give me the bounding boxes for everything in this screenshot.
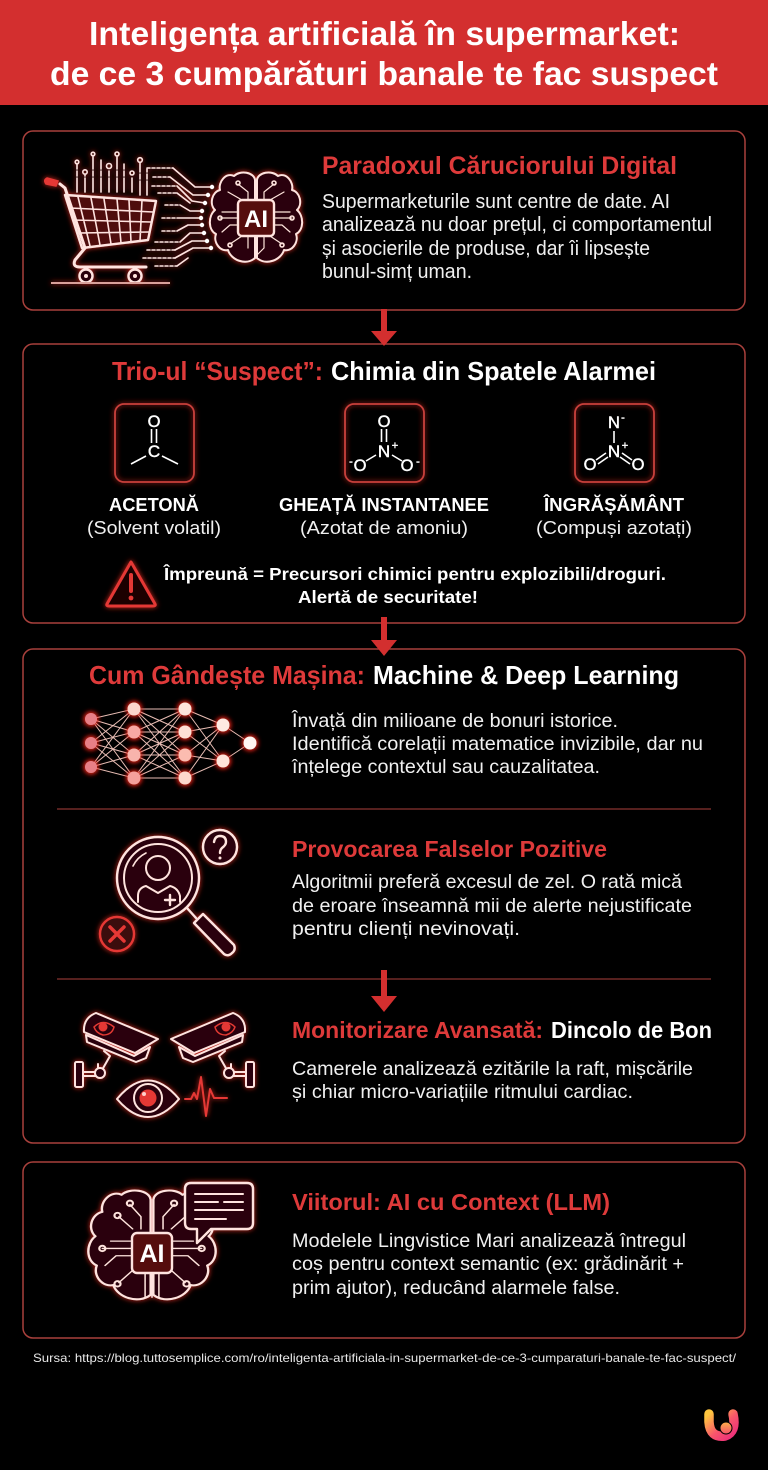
heading: Machine & Deep Learning: [373, 660, 679, 690]
heading: Chimia din Spatele Alarmei: [331, 356, 656, 386]
AI chip label: AI: [244, 206, 268, 233]
arrow: trio to machine: [371, 617, 397, 656]
icon: shopping cart connected to AI brain: [45, 152, 302, 283]
icon: ammonium nitrate formula: +: [392, 440, 398, 452]
label: fertilizer: ÎNGRĂȘĂMÂNT: [543, 494, 684, 515]
header banner: [0, 0, 768, 105]
body text: [292, 871, 692, 940]
body text: de eroare înseamnă mii de alerte nejustificate: [292, 895, 692, 917]
body text: Modelele Lingvistice Mari analizează întregul: [292, 1230, 686, 1252]
icon: fertilizer formula: +: [622, 440, 628, 452]
panel: suspect trio: [23, 344, 745, 623]
chart: neural network: [85, 702, 256, 784]
body text: Supermarketurile sunt centre de date. AI: [322, 190, 670, 213]
icon: fertilizer formula: N: [608, 442, 620, 461]
heart pulse: [185, 1077, 227, 1116]
icon: ammonium nitrate formula: -: [349, 456, 353, 468]
icon: fertilizer formula: O: [632, 456, 645, 474]
icon: warning triangle: [107, 562, 155, 606]
panel: digital cart paradox: [23, 131, 745, 310]
source line: Sursa: https://blog.tuttosemplice.com/ro/inteligenta-artificiala-in-supermarket-de-ce-3-cumparaturi-banale-te-fac-suspect/: [33, 1351, 737, 1365]
icon: fertilizer formula: O: [584, 456, 597, 474]
icon: magnifier over person: [100, 830, 237, 955]
label: instant ice: [279, 494, 489, 538]
heading: Provocarea Falselor Pozitive: [292, 836, 607, 862]
label: instant ice: GHEAȚĂ INSTANTANEE: [279, 494, 489, 515]
label: fertilizer: (Compuși azotați): [536, 518, 692, 538]
icon: ammonium nitrate formula: -: [416, 456, 420, 468]
icon: ammonium nitrate formula: O: [354, 457, 367, 475]
body text: coș pentru context semantic (ex: grădinărit +: [292, 1253, 684, 1275]
heading: [89, 660, 679, 690]
icon: ammonium nitrate formula: [345, 404, 424, 482]
body text: Identifică corelații matematice invizibile, dar nu: [292, 733, 703, 755]
left camera: [75, 1013, 158, 1087]
body text: și asocierile de produse, dar îi lipsește: [322, 237, 650, 260]
panel: how the machine thinks: [23, 649, 745, 1143]
label: acetone: [87, 494, 221, 538]
heading: Monitorizare Avansată:: [292, 1017, 543, 1043]
body text: [292, 1058, 693, 1103]
security alert text: Alertă de securitate!: [298, 587, 478, 607]
icon: ammonium nitrate formula: O: [401, 457, 414, 475]
label: fertilizer: [536, 494, 692, 538]
label: acetone: (Solvent volatil): [87, 518, 221, 538]
heading: Dincolo de Bon: [551, 1017, 712, 1043]
eye: [117, 1080, 179, 1117]
label: instant ice: (Azotat de amoniu): [300, 518, 468, 538]
body text: înțelege contextul sau cauzalitatea.: [291, 756, 600, 778]
security alert text: Împreună = Precursori chimici pentru explozibili/droguri.: [163, 563, 666, 584]
body text: Algoritmii preferă excesul de zel. O rată mică: [292, 871, 682, 893]
right camera: [171, 1013, 254, 1087]
icon: fertilizer formula: N: [608, 414, 620, 432]
icon: acetone formula: O: [148, 413, 161, 431]
body text: Camerele analizează ezitările la raft, mișcările: [292, 1058, 693, 1080]
body text: și chiar micro-variațiile ritmului cardiac.: [292, 1081, 633, 1103]
body text: [322, 190, 712, 283]
heading: [112, 356, 656, 386]
body text: [291, 709, 703, 778]
title: Inteligența artificială în supermarket:: [89, 15, 680, 53]
arrow: cart paradox to trio: [371, 309, 397, 346]
body text: prim ajutor), reducând alarmele false.: [292, 1277, 620, 1299]
label: acetone: ACETONĂ: [109, 494, 199, 515]
AI chip label: AI: [140, 1240, 164, 1268]
icon: AI brain with speech bubble: [88, 1183, 253, 1299]
icon: acetone formula: [115, 404, 194, 482]
title: [50, 15, 718, 92]
icon: ammonium nitrate formula: N: [378, 442, 390, 461]
body text: Învață din milioane de bonuri istorice.: [291, 709, 618, 732]
body text: analizează nu doar prețul, ci comportamentul: [322, 213, 712, 236]
heading: Trio-ul “Suspect”:: [112, 356, 323, 386]
body text: bunul-simț uman.: [322, 260, 472, 283]
heading: [292, 1017, 712, 1043]
title: de ce 3 cumpărături banale te fac suspect: [50, 55, 718, 92]
speech bubble: [185, 1183, 253, 1243]
icon: surveillance cameras, eye and pulse: [75, 1013, 254, 1117]
icon: fertilizer formula: [575, 404, 654, 482]
icon: fertilizer formula: -: [621, 412, 625, 424]
heading: Viitorul: AI cu Context (LLM): [292, 1189, 610, 1215]
panel: future AI with context: [23, 1162, 745, 1338]
body text: [292, 1230, 686, 1299]
heading: Cum Gândește Mașina:: [89, 660, 365, 690]
security alert text: [163, 563, 666, 607]
icon: ammonium nitrate formula: O: [378, 413, 391, 431]
icon: acetone formula: C: [148, 442, 160, 461]
body text: pentru clienți nevinovați.: [292, 918, 520, 940]
arrow: [371, 970, 397, 1012]
heading: Paradoxul Căruciorului Digital: [322, 152, 677, 180]
logo: [709, 1414, 734, 1436]
